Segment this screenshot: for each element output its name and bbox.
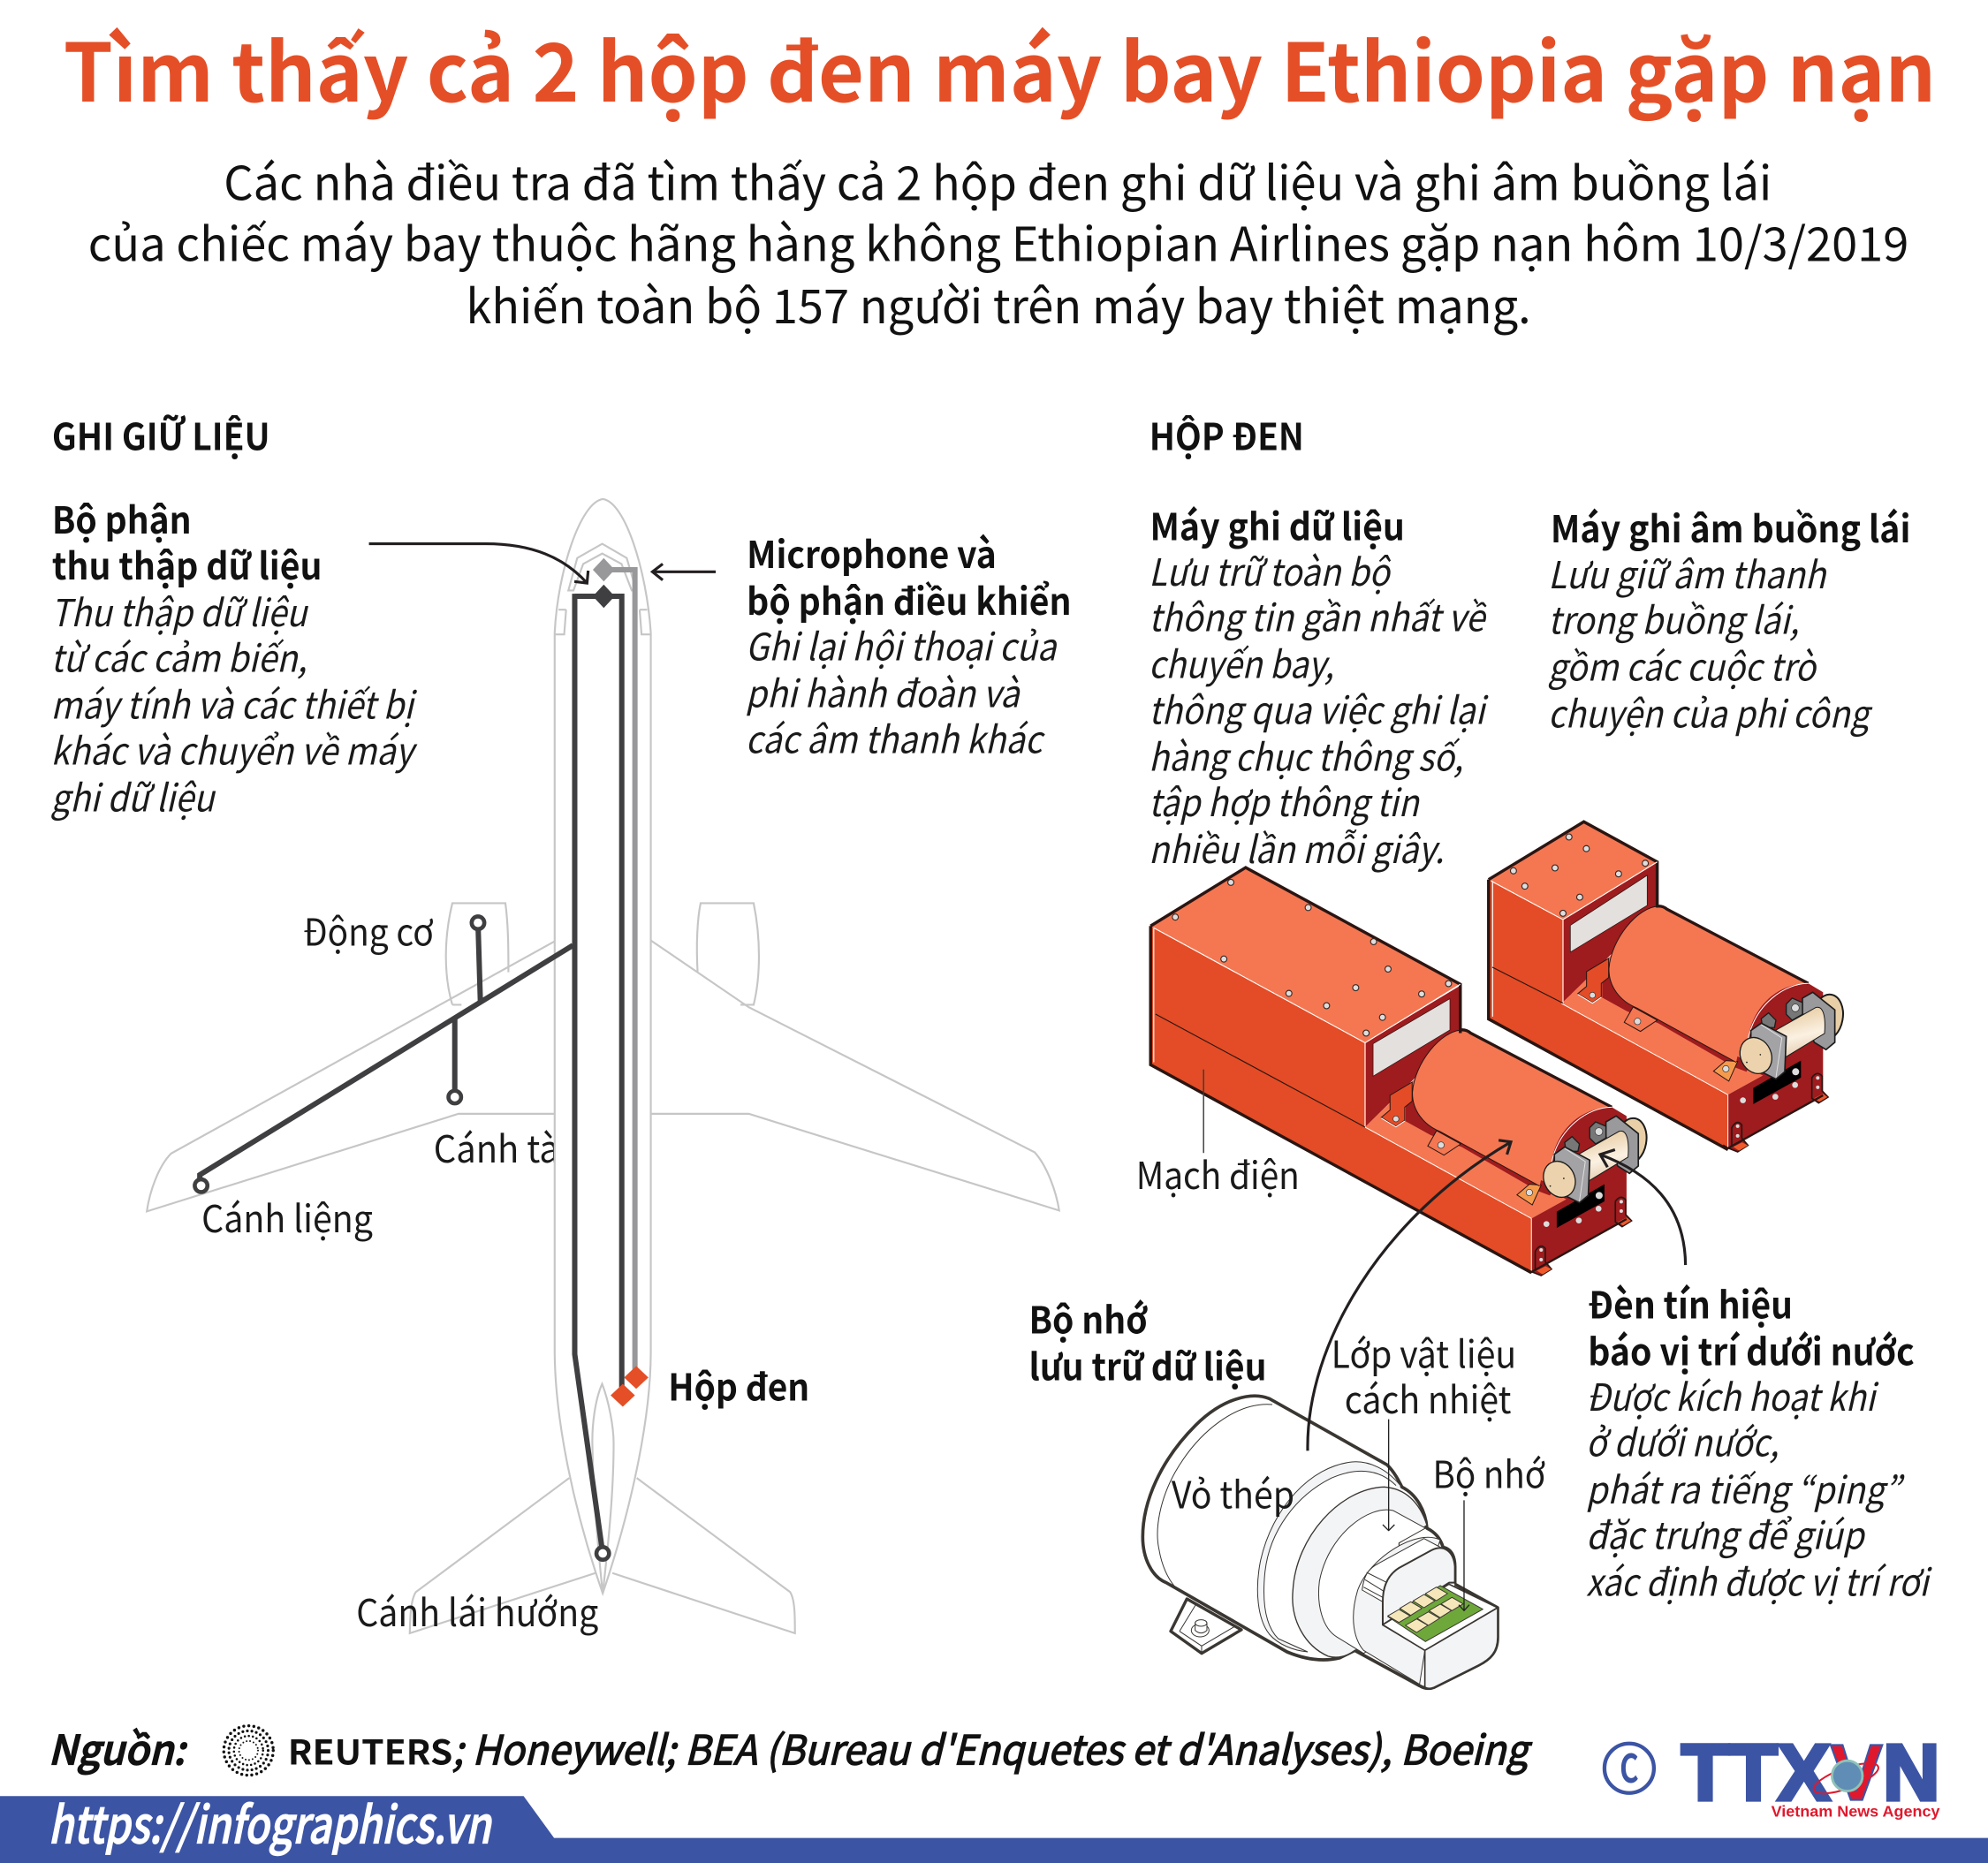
box top xyxy=(1489,822,1658,920)
label: cánh lái hướng: Cánh lái hướng xyxy=(356,1584,598,1638)
arrow: beacon xyxy=(1600,1149,1686,1265)
text: microphone và bộ phận điều khiển: Ghi lại hội thoại của xyxy=(746,618,1058,672)
text: bộ phận thu thập dữ liệu: Bộ phận xyxy=(52,491,192,544)
source line: Nguồn: xyxy=(49,1718,188,1776)
cylinder and beacon xyxy=(1561,906,1847,1152)
text: microphone và bộ phận điều khiển: Microphone và xyxy=(747,526,997,579)
label: động cơ: Động cơ xyxy=(303,903,434,957)
memory chips xyxy=(1388,1587,1463,1632)
rivets xyxy=(1510,834,1649,916)
text: đèn tín hiệu: xác định được vị trí rơi xyxy=(1586,1554,1932,1608)
text: microphone và bộ phận điều khiển: các âm thanh khác xyxy=(746,710,1046,764)
text: máy ghi âm buồng lái: Lưu giữ âm thanh xyxy=(1548,546,1827,600)
cockpit recorder wire xyxy=(603,570,635,1375)
heading: hộp đen: HỘP ĐEN xyxy=(1150,407,1304,460)
box body xyxy=(1489,880,1728,1148)
box top xyxy=(1150,867,1461,1043)
text: microphone và bộ phận điều khiển xyxy=(746,526,1072,764)
text: bộ nhớ lưu trữ dữ liệu: lưu trữ dữ liệu xyxy=(1028,1338,1267,1391)
footer band: https://infographics.vn xyxy=(49,1783,493,1858)
inner sleeve xyxy=(1354,1537,1440,1685)
intro text block xyxy=(88,147,1908,337)
text: máy ghi âm buồng lái: trong buồng lái, xyxy=(1548,591,1799,645)
intro text block: của chiếc máy bay thuộc hãng hàng không Ethiopian Airlines gặp nạn hôm 10/3/2019 xyxy=(88,208,1908,276)
text: đèn tín hiệu: ở dưới nước, xyxy=(1586,1414,1779,1468)
text: bộ nhớ lưu trữ dữ liệu: Bộ nhớ xyxy=(1028,1291,1149,1344)
label: mạch điện: Mạch điện xyxy=(1136,1147,1300,1200)
arrow: microphone xyxy=(652,564,716,580)
leader: mạch điện xyxy=(1203,1070,1204,1153)
wings and engines outline xyxy=(147,903,1059,1633)
text: máy ghi dữ liệu: tập hợp thông tin xyxy=(1149,774,1421,828)
label: lớp vật liệu cách nhiệt xyxy=(1332,1325,1516,1425)
text: máy ghi âm buồng lái: Máy ghi âm buồng lái xyxy=(1551,500,1910,553)
heading: ghi giữ liệu: GHI GIỮ LIỆU xyxy=(52,407,270,460)
memory tray xyxy=(1383,1584,1498,1650)
text: đèn tín hiệu: Được kích hoạt khi xyxy=(1586,1368,1879,1422)
illustration: cockpit voice recorder xyxy=(1489,822,1847,1152)
label: bộ nhớ: Bộ nhớ xyxy=(1432,1446,1545,1500)
label: lớp vật liệu cách nhiệt: cách nhiệt xyxy=(1345,1371,1511,1425)
source line: ; Honeywell; BEA (Bureau d'Enquetes et d'Analyses), Boeing xyxy=(452,1718,1533,1776)
cylinder and beacon xyxy=(1365,1030,1650,1276)
text: bộ phận thu thập dữ liệu: máy tính và các thiết bị xyxy=(50,677,418,731)
logo: copyright: C xyxy=(1620,1737,1639,1794)
arrow: memory xyxy=(1459,1500,1469,1610)
text: đèn tín hiệu: đặc trưng để giúp xyxy=(1586,1506,1866,1560)
label: cánh tà (behind fuselage): Cánh tà xyxy=(434,1120,559,1174)
illustration: flight data recorder xyxy=(1150,867,1650,1276)
text: máy ghi dữ liệu: hàng chục thông số, xyxy=(1149,728,1463,782)
arrow: recorder to memory xyxy=(1308,1140,1511,1450)
label: hộp đen: Hộp đen xyxy=(668,1359,809,1412)
arrow: insulation xyxy=(1383,1420,1394,1531)
sensors xyxy=(194,916,609,1560)
text: máy ghi dữ liệu: thông tin gần nhất về xyxy=(1149,589,1488,643)
label: cánh liệng: Cánh liệng xyxy=(201,1190,373,1244)
intro text block: khiến toàn bộ 157 người trên máy bay thiệt mạng. xyxy=(466,269,1531,337)
text: máy ghi dữ liệu: thông qua việc ghi lại xyxy=(1149,681,1489,735)
text: máy ghi dữ liệu: Lưu trữ toàn bộ xyxy=(1149,543,1392,597)
rivets xyxy=(1172,879,1452,1036)
circuit board xyxy=(1388,1586,1483,1641)
outer silhouette xyxy=(1142,1396,1498,1688)
data wires xyxy=(200,594,622,1554)
box body xyxy=(1150,926,1531,1271)
text: máy ghi âm buồng lái: chuyện của phi công xyxy=(1548,685,1873,739)
airplane diagram xyxy=(147,499,1059,1633)
title: Tìm thấy cả 2 hộp đen máy bay Ethiopia gặp nạn xyxy=(64,9,1936,125)
insulation layer xyxy=(1293,1487,1427,1657)
text: bộ phận thu thập dữ liệu: thu thập dữ liệu xyxy=(52,537,322,590)
text: đèn tín hiệu: Đèn tín hiệu xyxy=(1588,1276,1793,1329)
text: bộ phận thu thập dữ liệu: từ các cảm biến, xyxy=(50,630,307,684)
text: bộ phận thu thập dữ liệu: Thu thập dữ liệu xyxy=(50,584,308,638)
text: đèn tín hiệu xyxy=(1586,1276,1932,1608)
fuselage xyxy=(555,499,651,1594)
text: microphone và bộ phận điều khiển: phi hành đoàn và xyxy=(746,665,1021,719)
logo: copyright xyxy=(1605,1737,1654,1794)
text: máy ghi âm buồng lái xyxy=(1548,500,1910,739)
text: bộ nhớ lưu trữ dữ liệu xyxy=(1028,1291,1267,1391)
icon: reuters dots xyxy=(224,1726,273,1776)
intro text block: Các nhà điều tra đã tìm thấy cả 2 hộp đen ghi dữ liệu và ghi âm buồng lái xyxy=(224,147,1772,215)
illustration: memory module xyxy=(1142,1396,1498,1688)
steel case details xyxy=(1157,1405,1272,1587)
text: đèn tín hiệu: báo vị trí dưới nước xyxy=(1588,1322,1915,1375)
arrow: data acquisition xyxy=(369,544,588,583)
mounting foot xyxy=(1171,1599,1241,1654)
label: lớp vật liệu cách nhiệt: Lớp vật liệu xyxy=(1332,1325,1516,1379)
logo: ttxvn: TTXVN xyxy=(1681,1729,1939,1818)
label: vỏ thép: Vỏ thép xyxy=(1172,1466,1294,1520)
diamond: data acquisition unit xyxy=(593,585,615,608)
diamond: microphone unit xyxy=(593,558,615,581)
source line: REUTERS xyxy=(288,1725,452,1775)
text: bộ phận thu thập dữ liệu xyxy=(50,491,418,822)
text: máy ghi dữ liệu: chuyến bay, xyxy=(1149,636,1334,690)
text: máy ghi dữ liệu xyxy=(1149,497,1489,875)
logo: ttxvn: Vietnam News Agency xyxy=(1772,1802,1939,1820)
text: bộ phận thu thập dữ liệu: khác và chuyển về máy xyxy=(50,722,418,776)
footer band xyxy=(0,1783,1988,1863)
text: máy ghi dữ liệu: nhiều lần mỗi giây. xyxy=(1149,821,1444,875)
text: microphone và bộ phận điều khiển: bộ phận điều khiển xyxy=(747,572,1072,625)
diamonds: black boxes xyxy=(611,1366,649,1406)
cockpit and tail details xyxy=(555,544,651,1594)
text: bộ phận thu thập dữ liệu: ghi dữ liệu xyxy=(50,769,216,822)
text: máy ghi dữ liệu: Máy ghi dữ liệu xyxy=(1150,497,1405,550)
text: máy ghi âm buồng lái: gồm các cuộc trò xyxy=(1548,639,1818,693)
text: đèn tín hiệu: phát ra tiếng “ping” xyxy=(1586,1461,1905,1515)
